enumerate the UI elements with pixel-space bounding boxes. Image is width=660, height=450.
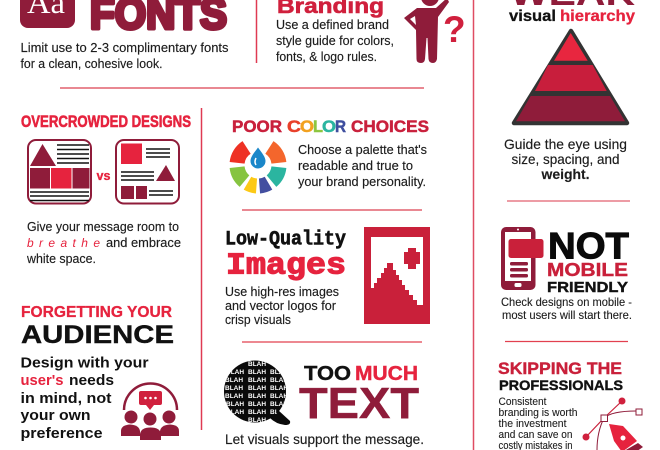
- heading: mobile: MOBILE: [547, 260, 628, 280]
- chart: pyramid: [514, 31, 627, 123]
- text: professionals advice: and can save on: [498, 429, 572, 441]
- heading: friendly: FRIENDLY: [547, 279, 628, 296]
- panel: overcrowded designs: [21, 113, 191, 266]
- text: mobile advice: [501, 295, 632, 322]
- heading: skipping the: SKIPPING THE: [498, 359, 622, 378]
- icon: blah speech bubble: BLAH: [270, 377, 288, 384]
- text: branding advice: [276, 17, 394, 64]
- heading: poor color choices: O: [322, 118, 336, 136]
- icon: pixelated image: [364, 227, 430, 324]
- heading: poor color choices: CHOICES: [351, 118, 429, 136]
- icon: blah speech bubble: BLAH: [270, 369, 288, 376]
- icon: phone: [501, 227, 544, 290]
- diagram: clean layout: [116, 140, 179, 204]
- heading: overcrowded designs: OVERCROWDED DESIGNS: [21, 113, 191, 131]
- heading: poor color choices: [232, 118, 429, 136]
- heading: poor color choices: L: [313, 118, 323, 136]
- icon: blah speech bubble: BLAH: [248, 409, 266, 416]
- icon: blah speech bubble: BLAH: [248, 361, 266, 368]
- heading: images: Images: [226, 248, 346, 284]
- text: overcrowded advice: breathe: [27, 236, 100, 250]
- heading: poor color choices: C: [287, 118, 301, 136]
- heading: poor color choices: POOR: [232, 118, 282, 136]
- icon: blah speech bubble: BLAH: [225, 377, 243, 384]
- text: fonts advice: [20, 40, 229, 71]
- text: audience advice: Design with your: [20, 354, 149, 372]
- text: mobile advice: Check designs on mobile -: [501, 295, 632, 309]
- heading: visual hierarchy: [509, 8, 635, 25]
- heading: too much: [304, 363, 418, 385]
- text: professionals advice: Consistent: [498, 396, 546, 408]
- text: branding advice: Use a defined brand: [276, 17, 389, 32]
- heading: not: NOT: [548, 226, 629, 266]
- diagram: crowded layout: [28, 140, 91, 204]
- icon: Aa font box: [20, 0, 75, 28]
- icon: blah speech bubble: BLAH: [226, 401, 244, 408]
- text: images advice: [225, 284, 339, 327]
- text: audience advice: your own: [20, 407, 90, 424]
- text: hierarchy advice: weight.: [541, 166, 590, 182]
- icon: confused person: [404, 0, 449, 63]
- icon: audience group: [121, 384, 179, 440]
- text: audience advice: preference: [20, 425, 102, 442]
- text: overcrowded advice: Give your message room to: [27, 219, 179, 234]
- text: color advice: [298, 142, 427, 189]
- label: vs: vs: [96, 168, 110, 183]
- panel: poor color choices: [232, 118, 429, 189]
- panel: branding: [276, 0, 466, 64]
- icon: blah speech bubble: BLAH: [225, 385, 243, 392]
- heading: too much: TOO: [304, 363, 351, 385]
- text: color advice: Choose a palette that's: [298, 142, 427, 157]
- icon: blah speech bubble: BLAH: [248, 417, 266, 424]
- text: fonts advice: Limit use to 2-3 complimentary fonts: [20, 40, 229, 55]
- panel: forgetting your audience: [20, 304, 179, 442]
- icon: question mark: ?: [443, 9, 466, 50]
- icon: blah speech bubble: BLAH: [270, 393, 288, 400]
- text: overcrowded advice: [26, 219, 181, 266]
- text: audience advice: [20, 354, 149, 442]
- panel: not mobile friendly: [501, 226, 632, 322]
- icon: blah speech bubble: BLAH: [248, 377, 266, 384]
- text: branding advice: style guide for colors,: [276, 33, 394, 48]
- text: fonts advice: for a clean, cohesive look.: [20, 56, 162, 71]
- icon: blah speech bubble: BLAH: [270, 385, 288, 392]
- text: images advice: crisp visuals: [225, 312, 291, 327]
- text: overcrowded advice: and embrace: [106, 235, 181, 250]
- heading: professionals: PROFESSIONALS: [499, 377, 623, 393]
- text: color advice: readable and true to: [298, 158, 413, 173]
- text: professionals advice: branding is worth: [498, 407, 578, 419]
- panel: too much text: [224, 360, 424, 447]
- icon: blah speech bubble: BLAH: [226, 369, 244, 376]
- text: overcrowded advice: white space.: [26, 251, 96, 266]
- text: audience advice: in mind, not: [20, 390, 112, 407]
- icon: blah speech bubble: [224, 360, 290, 425]
- panel: skipping the professionals: [498, 359, 643, 450]
- icon: blah speech bubble: BLAH: [248, 369, 266, 376]
- icon: vector pen tool: [582, 398, 643, 450]
- panel: weak visual hierarchy: [504, 0, 636, 182]
- text: audience advice: needs: [69, 372, 114, 389]
- heading: text: TEXT: [299, 379, 419, 428]
- text: color advice: your brand personality.: [298, 174, 426, 189]
- heading: visual hierarchy: visual: [509, 8, 556, 25]
- text: hierarchy advice: Guide the eye using: [504, 136, 627, 152]
- text: branding advice: fonts, & logo rules.: [276, 49, 377, 64]
- text: visuals advice: Let visuals support the message.: [225, 431, 424, 447]
- heading: audience: AUDIENCE: [21, 321, 174, 349]
- heading: forgetting your: FORGETTING YOUR: [21, 304, 172, 321]
- text: hierarchy advice: [504, 136, 627, 182]
- panel: low-quality images: [225, 227, 430, 327]
- heading: poor color choices: O: [300, 118, 314, 136]
- heading: visual hierarchy: hierarchy: [560, 8, 635, 25]
- icon: color wheel: [237, 147, 279, 186]
- text: hierarchy advice: size, spacing, and: [512, 151, 620, 167]
- icon: blah speech bubble: BLAH: [270, 409, 288, 416]
- icon: blah speech bubble: BLAH: [270, 401, 288, 408]
- text: professionals advice: the investment: [498, 418, 566, 430]
- heading: poor color choices: R: [335, 118, 346, 136]
- icon: blah speech bubble: BLAH: [226, 409, 244, 416]
- icon: blah speech bubble: BLAH: [248, 393, 266, 400]
- text: audience advice: user's: [20, 372, 64, 389]
- text: images advice: and vector logos for: [225, 298, 337, 313]
- icon: blah speech bubble: BLAH: [225, 393, 243, 400]
- text: mobile advice: most users will start there.: [502, 308, 632, 322]
- icon: blah speech bubble: BLAH: [248, 385, 266, 392]
- icon: blah speech bubble: BLAH: [248, 401, 266, 408]
- text: images advice: Use high-res images: [225, 284, 339, 299]
- heading: low-quality: Low-Quality: [225, 228, 346, 252]
- panel: limit fonts: [20, 0, 229, 71]
- text: professionals advice: [498, 396, 578, 450]
- heading: too much: MUCH: [355, 363, 418, 385]
